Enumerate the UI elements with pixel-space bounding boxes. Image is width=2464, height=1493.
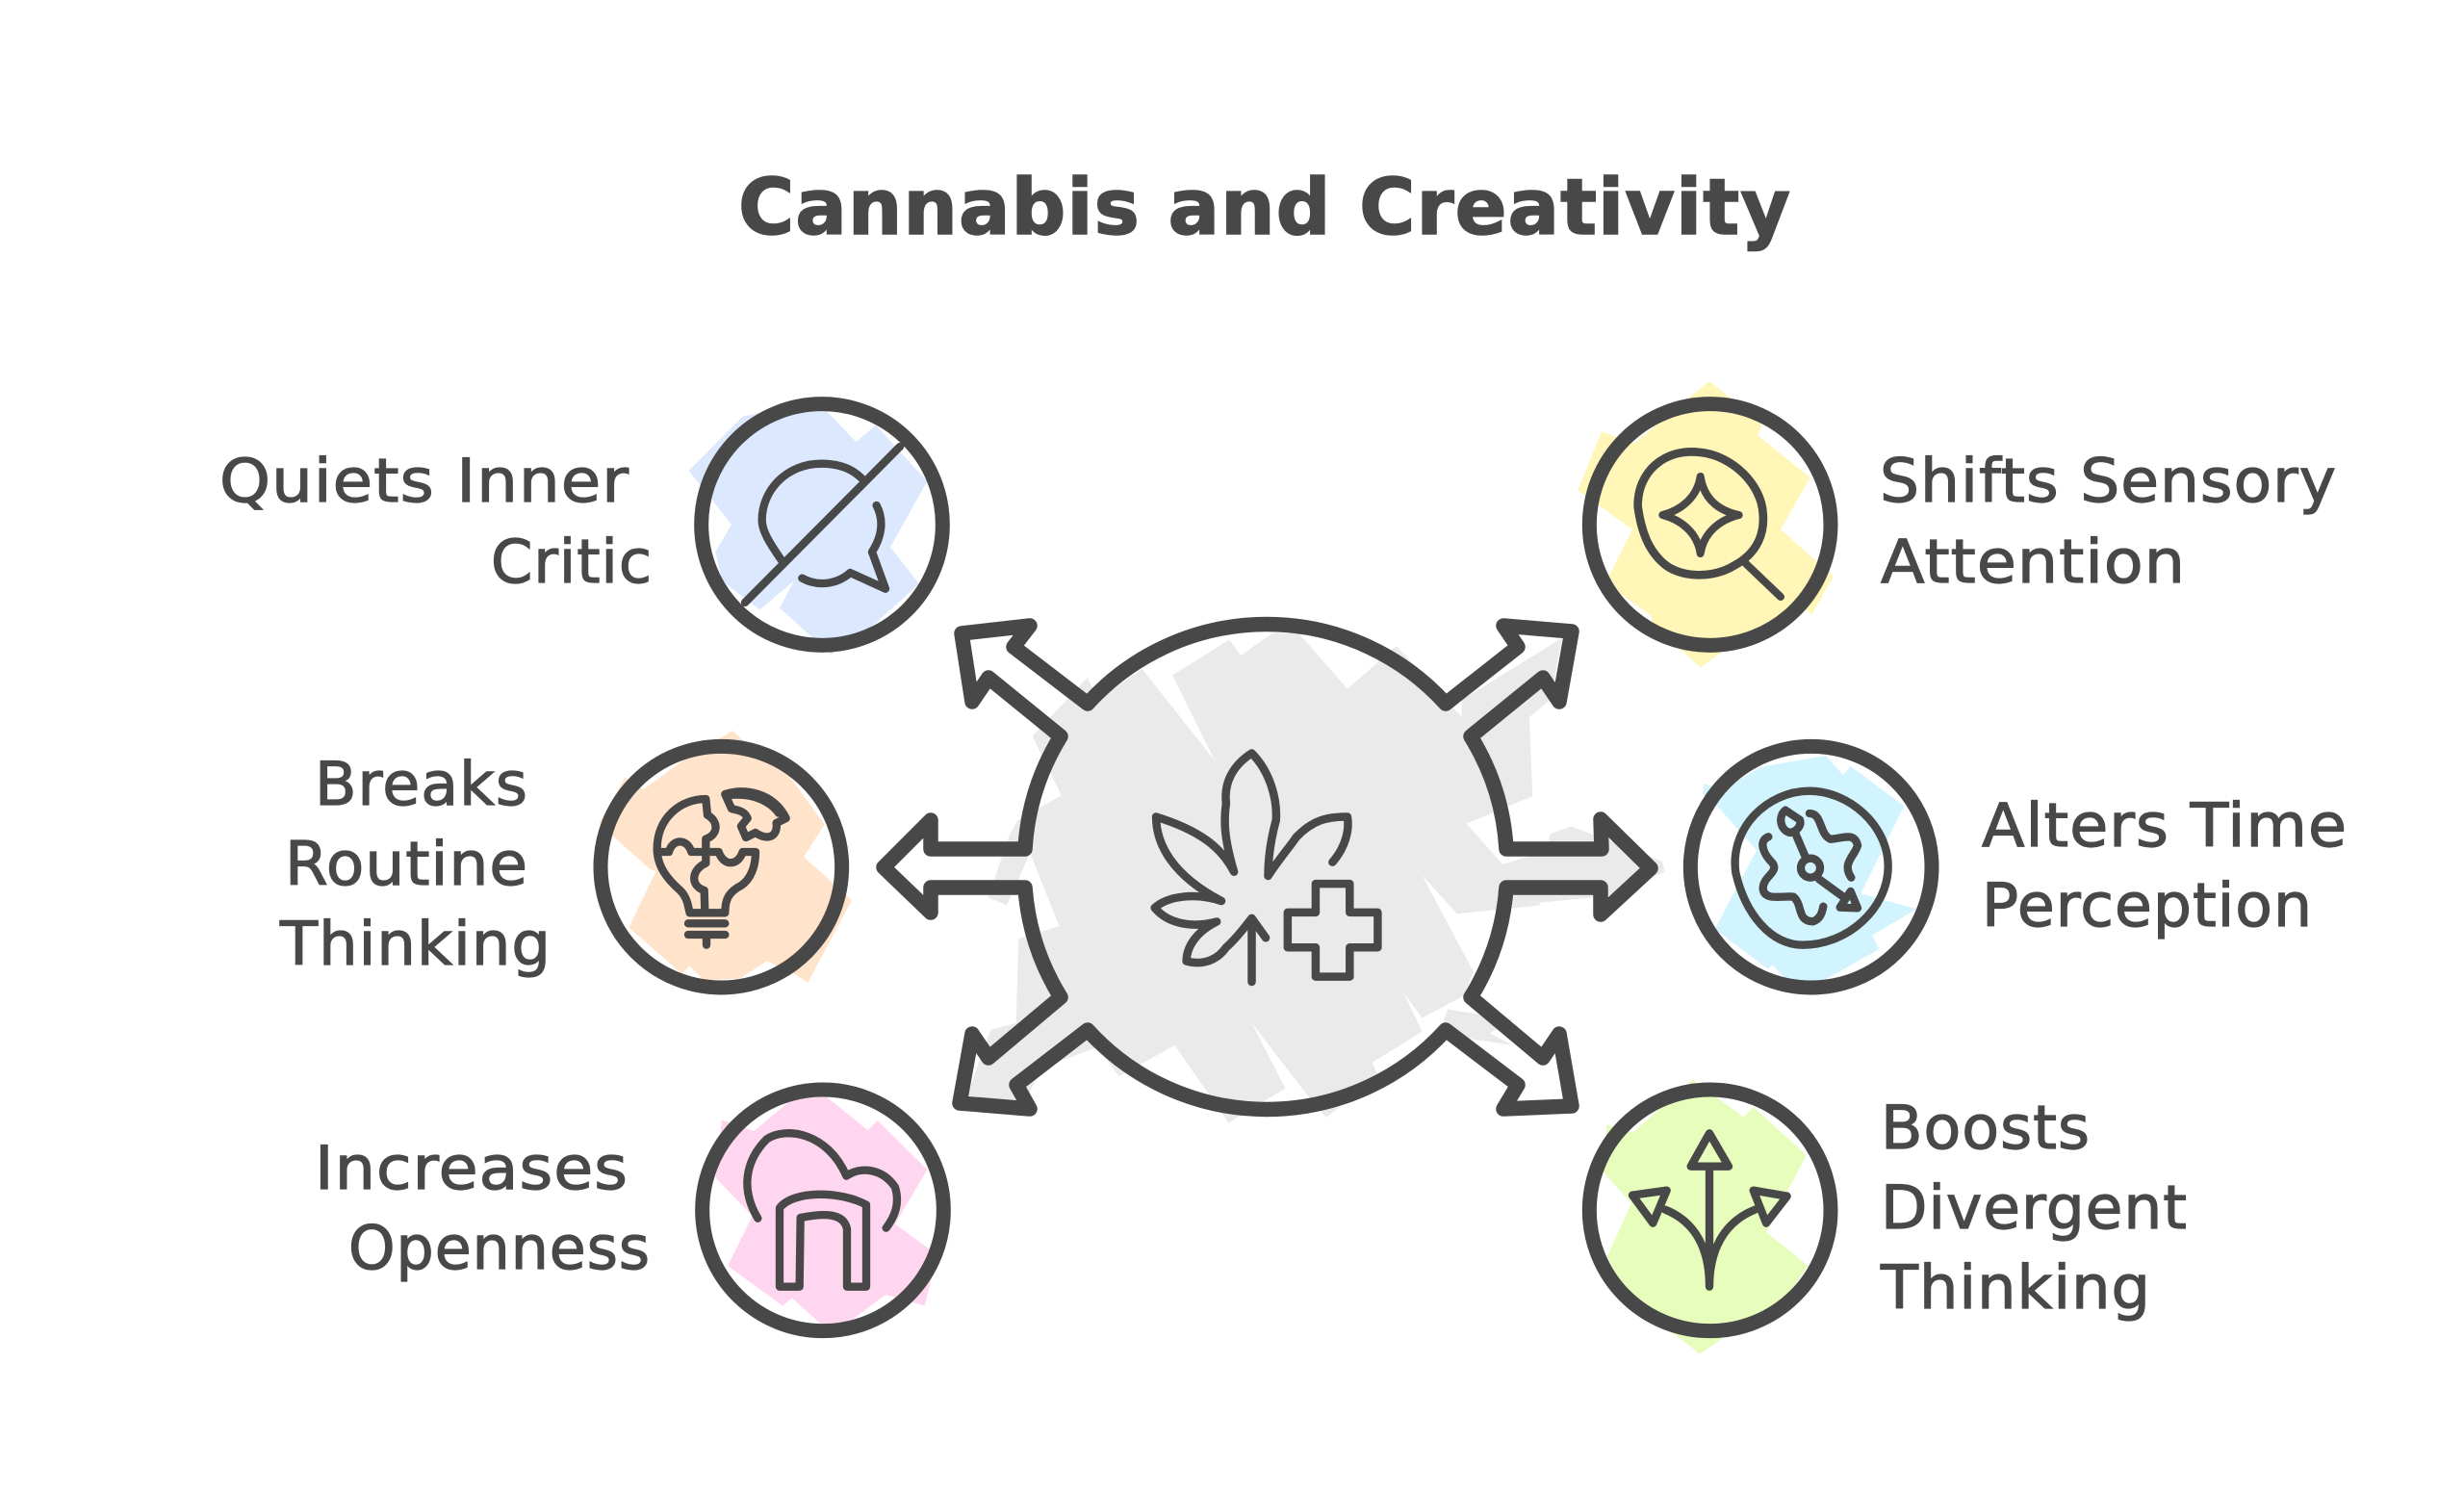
hub outline and six arrows <box>884 625 1651 1109</box>
node: increases openness <box>703 1090 943 1331</box>
label: boosts divergent thinking: Boosts <box>1881 1093 2091 1163</box>
hub sketch fill <box>967 632 1664 1122</box>
title: Cannabis and Creativity <box>738 163 1791 252</box>
label: breaks routine thinking: Breaks <box>315 749 528 819</box>
label: breaks routine thinking: Routine <box>285 829 528 899</box>
label: breaks routine thinking: Thinking <box>279 909 552 979</box>
label: increases openness: Increases <box>315 1133 629 1203</box>
node: breaks routine thinking <box>600 731 852 988</box>
label: increases openness <box>315 1133 651 1283</box>
node: boosts divergent thinking <box>1589 1080 1831 1354</box>
label: quiets inner critic: Quiets Inner <box>219 446 629 516</box>
icon: magnifier with sparkle <box>1638 451 1763 575</box>
label: shifts sensory attention: Attention <box>1881 527 2186 597</box>
icon: three diverging arrows <box>1632 1133 1787 1287</box>
label: alters time perception <box>1982 790 2348 940</box>
icon: cloud and archway <box>747 1133 897 1287</box>
node: shifts sensory attention <box>1578 381 1834 667</box>
icon: crossed-out speech bubble <box>745 447 900 603</box>
label: breaks routine thinking <box>279 749 552 979</box>
node: quiets inner critic <box>689 404 942 655</box>
icon: puzzle light bulb <box>657 791 786 945</box>
central hub with arrows <box>884 625 1664 1122</box>
label: boosts divergent thinking: Divergent <box>1881 1172 2188 1243</box>
label: boosts divergent thinking: Thinking <box>1880 1252 2151 1323</box>
label: shifts sensory attention: Shifts Sensory <box>1880 446 2337 516</box>
label: alters time perception: Alters Time <box>1982 790 2348 861</box>
label: increases openness: Openness <box>348 1213 651 1283</box>
icon: cannabis leaf with plus <box>1155 753 1377 982</box>
label: shifts sensory attention <box>1880 446 2337 597</box>
label: boosts divergent thinking <box>1880 1093 2188 1323</box>
icon: warped clock <box>1735 791 1888 945</box>
label: quiets inner critic <box>219 446 653 597</box>
node: alters time perception <box>1690 746 1937 988</box>
label: alters time perception: Perception <box>1982 870 2313 940</box>
label: quiets inner critic: Critic <box>491 527 653 597</box>
